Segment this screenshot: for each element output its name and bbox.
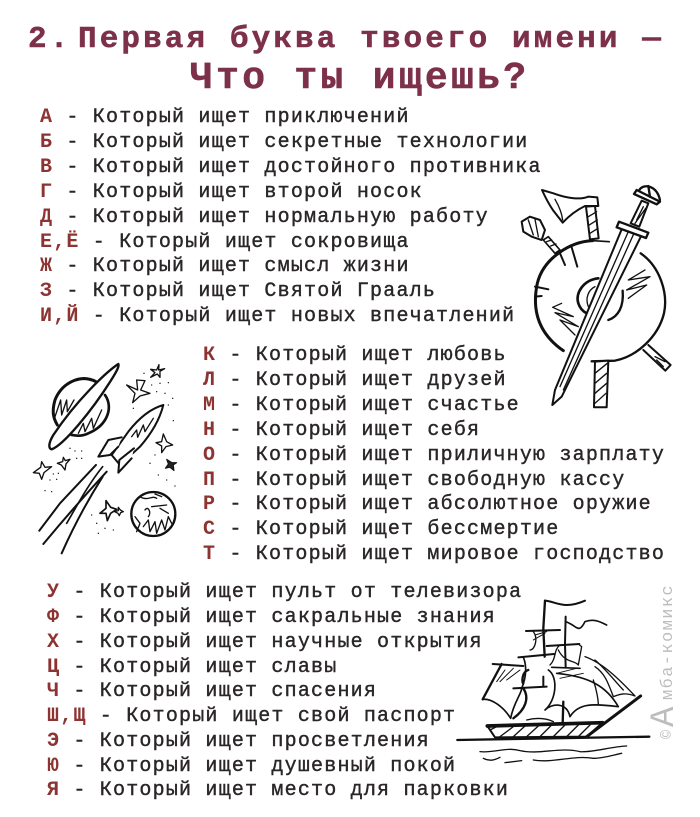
list: letters К to Т	[203, 344, 665, 566]
list: letters У to Я: Ц - Который ищет славы	[47, 656, 337, 679]
title line 1: 2.	[28, 22, 71, 57]
list: letters А to И: В - Который ищет достойного противника	[40, 156, 542, 179]
list: letters У to Я: Я - Который ищет место для парковки	[47, 779, 509, 802]
list: letters У to Я: Ч - Который ищет спасения	[47, 680, 377, 703]
icon: sailing ship	[457, 601, 649, 763]
list: letters К to Т: С - Который ищет бессмертие	[203, 518, 559, 541]
list: letters У to Я: Э - Который ищет просветления	[47, 730, 430, 753]
icon: shield, sword, axe and mace	[522, 186, 671, 407]
list: letters У to Я: Х - Который ищет научные открытия	[47, 631, 483, 654]
list: letters К to Т: Т - Который ищет мировое господство	[203, 543, 665, 566]
list: letters К to Т: О - Который ищет приличную зарплату	[203, 444, 665, 467]
list: letters А to И: А - Который ищет приключений	[40, 106, 410, 129]
list: letters К to Т: Н - Который ищет себя	[203, 419, 480, 442]
watermark: Amba-komiks credit: ©	[659, 730, 676, 739]
list: letters К to Т: П - Который ищет свободную кассу	[203, 469, 625, 492]
title line 1: Первая буква твоего имени —	[78, 22, 664, 57]
list: letters К to Т: К - Который ищет любовь	[203, 344, 507, 367]
list: letters У to Я: Ш,Щ - Который ищет свой паспорт	[47, 705, 456, 728]
list: letters У to Я: Ю - Который ищет душевный покой	[47, 755, 456, 778]
list: letters А to И: И,Й - Который ищет новых впечатлений	[40, 304, 515, 328]
list: letters К to Т: Л - Который ищет друзей	[203, 369, 507, 392]
title line 2: Что ты ищешь?	[190, 57, 529, 100]
watermark: Amba-komiks credit: мба-комикс	[659, 584, 678, 700]
watermark: Amba-komiks credit	[646, 584, 684, 739]
list: letters А to И: Г - Который ищет второй носок	[40, 181, 423, 204]
list: letters А to И: Д - Который ищет нормальную работу	[40, 206, 489, 229]
list: letters К to Т: Р - Который ищет абсолютное оружие	[203, 493, 652, 516]
title	[28, 22, 664, 100]
list: letters А to И: З - Который ищет Святой Грааль	[40, 280, 436, 303]
list: letters У to Я	[47, 581, 522, 802]
list: letters А to И: Ж - Который ищет смысл жизни	[40, 255, 410, 278]
icon: rocket, planets and stars	[33, 364, 177, 553]
list: letters У to Я: У - Который ищет пульт от телевизора	[47, 581, 522, 604]
list: letters У to Я: Ф - Который ищет сакральные знания	[47, 606, 496, 629]
list: letters А to И: Е,Ё - Который ищет сокровища	[40, 230, 410, 254]
list: letters А to И: Б - Который ищет секретные технологии	[40, 131, 528, 154]
watermark: Amba-komiks credit: А	[646, 706, 684, 727]
list: letters А to И	[40, 106, 542, 328]
list: letters К to Т: М - Который ищет счастье	[203, 394, 520, 417]
